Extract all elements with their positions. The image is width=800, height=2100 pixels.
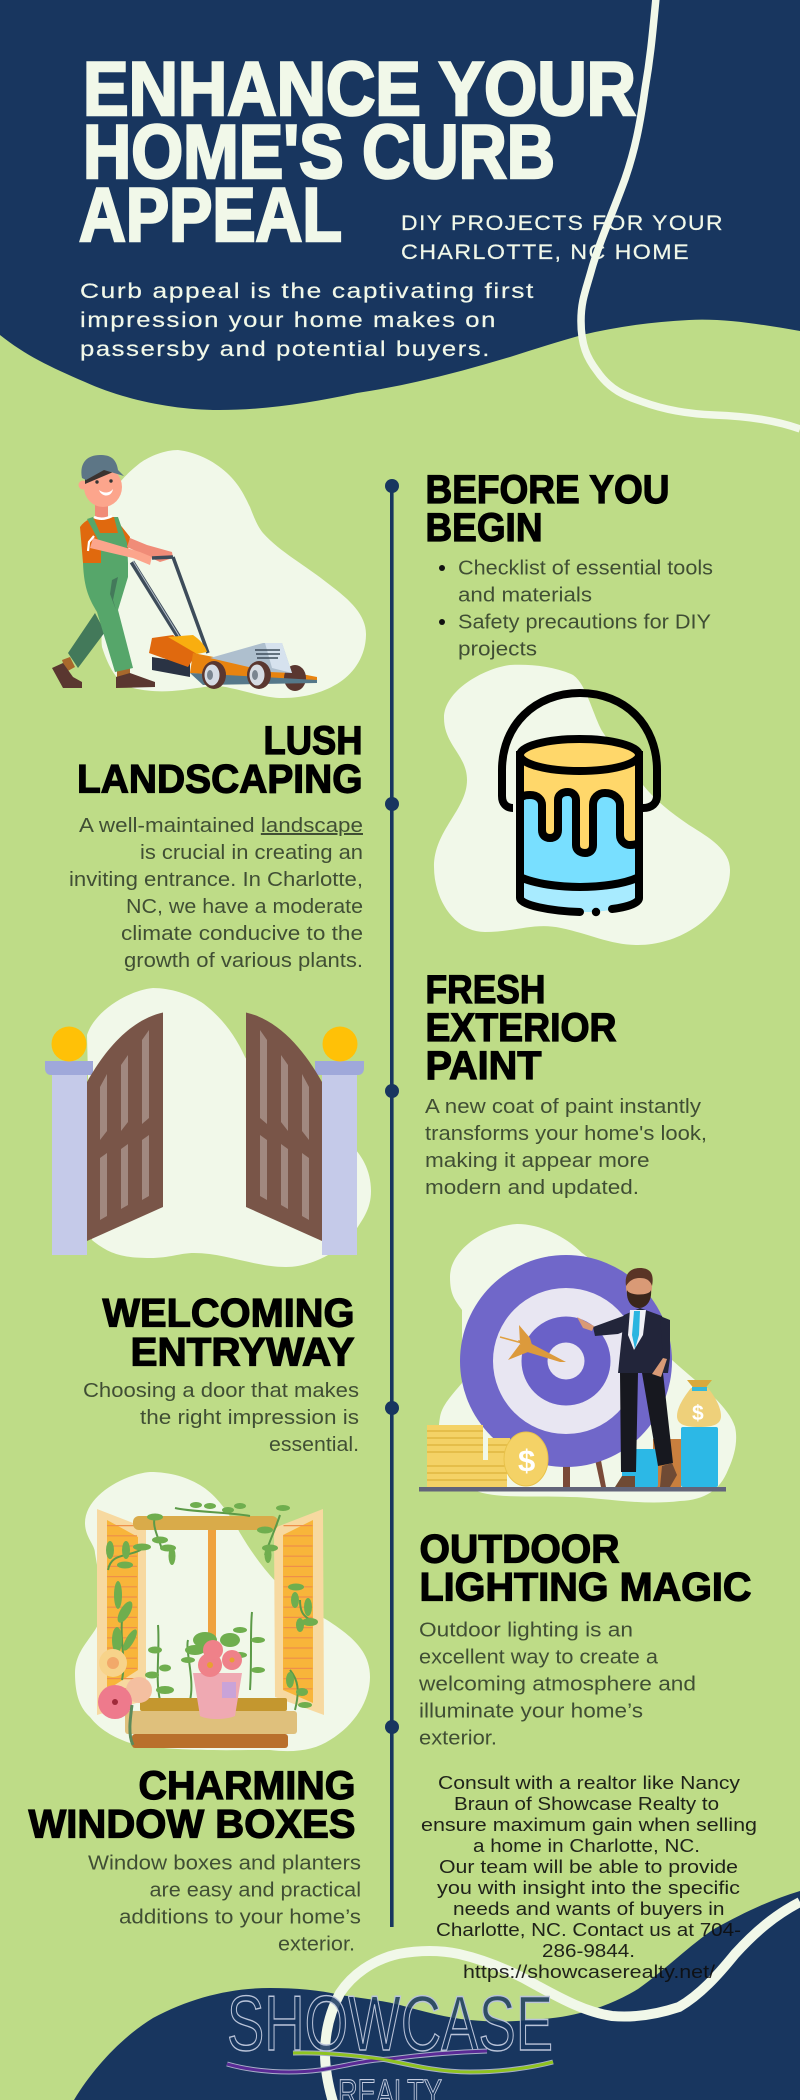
text: outdoor lighting magic [418,1620,696,1750]
heading: fresh exterior paint: FRESH [426,968,546,1012]
icon: window with shutters and flowers [97,1502,324,1748]
intro text [80,280,535,361]
icon: open gate [45,1012,364,1255]
text: lush landscaping: A well-maintained landscape [79,815,363,837]
heading: lush landscaping [77,719,362,802]
consultation text: a home in Charlotte, NC. [473,1835,700,1856]
intro text: impression your home makes on [80,309,497,332]
text: outdoor lighting magic: Outdoor lighting is an [419,1620,633,1642]
footer navy wave [74,1891,800,2100]
heading: before you begin: BEFORE YOU [426,468,670,512]
blob: lawn [102,450,366,698]
heading: before you begin [426,468,670,550]
heading: charming window boxes: WINDOW BOXES [28,1802,356,1846]
heading: fresh exterior paint: EXTERIOR [426,1006,617,1050]
text: welcoming entryway [83,1380,359,1456]
text: lush landscaping [69,815,363,972]
text: charming window boxes: additions to your home’s [119,1906,361,1928]
text: outdoor lighting magic: exterior. [419,1728,497,1750]
text: welcoming entryway: essential. [269,1434,359,1456]
intro text: passersby and potential buyers. [80,338,491,361]
heading: outdoor lighting magic [420,1528,752,1610]
logo: Showcase Realty [227,1979,553,2100]
blob: window [75,1472,370,1751]
consultation text: https://showcaserealty.net/ [463,1961,716,1982]
text: outdoor lighting magic: excellent way to create a [419,1646,659,1668]
text: charming window boxes: are easy and practical [150,1880,361,1902]
text: outdoor lighting magic: welcoming atmosphere and [418,1674,696,1696]
title: HOME'S CURB [83,110,555,195]
consultation text: Charlotte, NC. Contact us at 704- [436,1919,741,1940]
consultation text: ensure maximum gain when selling [421,1814,757,1835]
icon: target with businessman and coins: $ [518,1443,535,1478]
heading: welcoming entryway [102,1292,355,1374]
text: lush landscaping: NC, we have a moderate [126,896,363,918]
heading: before you begin: BEGIN [426,506,542,550]
blob: gate [87,988,371,1267]
intro text: Curb appeal is the captivating first [80,280,535,303]
icon: paint can [502,693,657,916]
consultation text: Consult with a realtor like Nancy [438,1772,741,1793]
checklist: projects [458,638,537,660]
heading: outdoor lighting magic: OUTDOOR [420,1528,620,1572]
checklist: Checklist of essential tools [458,558,713,580]
blob: target [439,1224,736,1503]
text: fresh exterior paint [425,1096,707,1199]
icon: man mowing lawn [52,455,317,691]
text: charming window boxes: Window boxes and planters [88,1852,361,1874]
title: ENHANCE YOUR [83,47,636,132]
header navy wave [0,0,800,410]
consultation text: needs and wants of buyers in [453,1898,724,1919]
heading: outdoor lighting magic: LIGHTING MAGIC [420,1566,752,1610]
heading: fresh exterior paint [426,968,617,1088]
text: lush landscaping: growth of various plants. [124,950,363,972]
text: lush landscaping: climate conducive to the [121,923,363,945]
heading: fresh exterior paint: PAINT [426,1044,542,1088]
title: APPEAL [79,173,342,258]
text: outdoor lighting magic: illuminate your home’s [419,1700,643,1722]
heading: welcoming entryway: ENTRYWAY [130,1330,355,1374]
text: fresh exterior paint: transforms your home's look, [425,1123,707,1145]
text: lush landscaping: is crucial in creating an [140,842,363,864]
text: welcoming entryway: the right impression is [140,1407,359,1429]
checklist: Safety precautions for DIY [458,612,711,634]
text: fresh exterior paint: modern and updated. [425,1177,639,1199]
text: charming window boxes: exterior. [278,1934,355,1956]
timeline [385,479,399,1927]
icon: target with businessman and coins: $ [692,1402,704,1425]
heading: lush landscaping: LUSH [264,719,362,763]
logo: Showcase Realty: SHOWCASE [227,1979,553,2067]
heading: lush landscaping: LANDSCAPING [77,758,362,802]
text: charming window boxes [88,1852,361,1956]
subtitle: DIY PROJECTS FOR YOUR [401,212,724,235]
blob: paint can [434,665,730,945]
text: fresh exterior paint: making it appear more [425,1150,650,1172]
subtitle: CHARLOTTE, NC HOME [401,241,690,264]
footer curved line [325,1902,800,2100]
consultation text [421,1772,757,1982]
consultation text: 286-9844. [542,1940,635,1961]
consultation text: Braun of Showcase Realty to [454,1793,719,1814]
heading: welcoming entryway: WELCOMING [102,1292,354,1336]
heading: charming window boxes [28,1764,356,1846]
text: welcoming entryway: Choosing a door that makes [83,1380,359,1402]
text: lush landscaping: inviting entrance. In Charlotte, [69,869,363,891]
consultation text: Our team will be able to provide [439,1856,738,1877]
text: fresh exterior paint: A new coat of paint instantly [425,1096,701,1118]
heading: charming window boxes: CHARMING [138,1764,356,1808]
icon: target with businessman and coins [419,1255,726,1492]
checklist: and materials [458,584,592,606]
title [79,47,636,258]
header curved line [581,0,800,429]
checklist [439,558,713,660]
consultation text: you with insight into the specific [437,1877,740,1898]
subtitle [401,212,724,264]
